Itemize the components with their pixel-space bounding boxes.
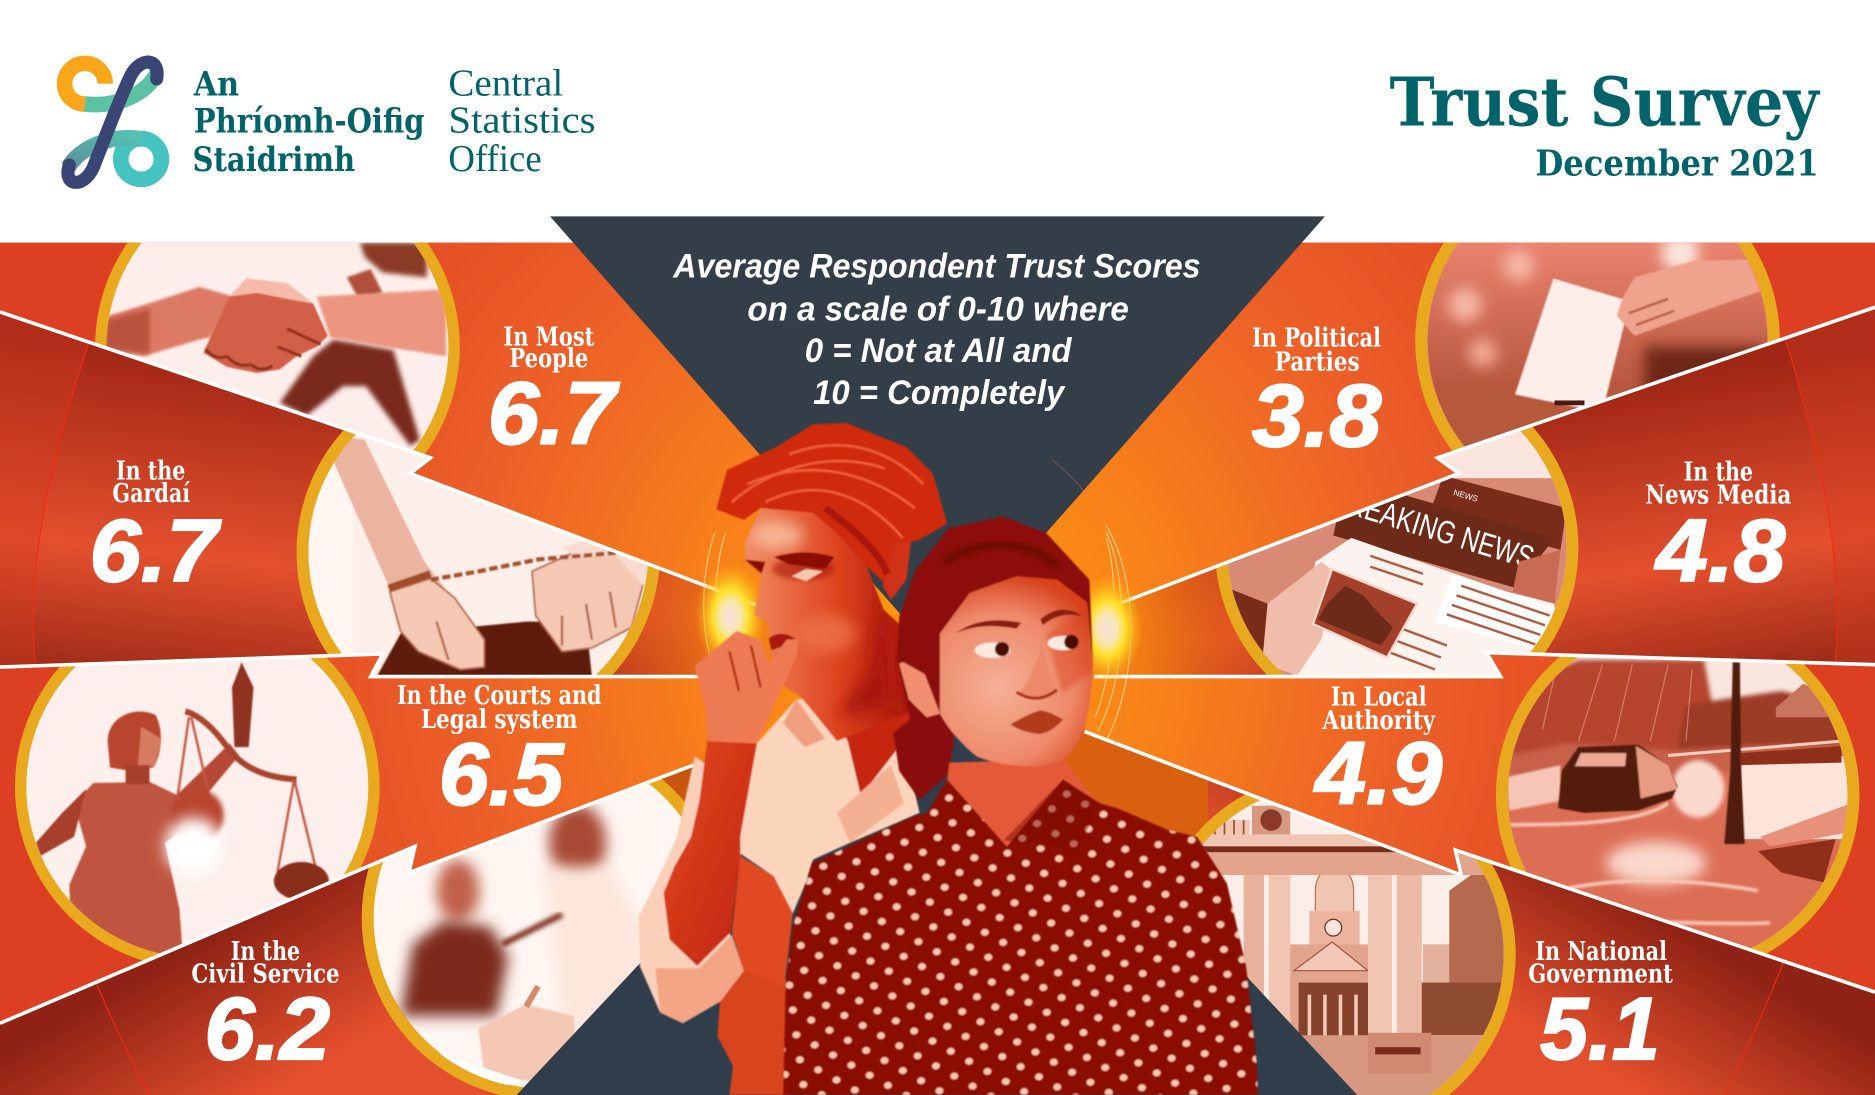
- number: in national government: Government: [1528, 960, 1673, 990]
- man neck: [800, 637, 914, 777]
- number: in most people: 6.7: [488, 364, 620, 462]
- woman face: [940, 576, 1093, 766]
- illustration: woman: [783, 516, 1258, 1095]
- man hair: [716, 423, 947, 583]
- photo: lady justice: [14, 658, 380, 960]
- panel: in political parties: [1046, 242, 1875, 610]
- number: in national government: In National: [1535, 937, 1667, 967]
- photo: civil servants writing: [362, 779, 686, 1095]
- photo: breaking news: BREAKING NEWS: [1328, 480, 1538, 576]
- man chest: [804, 646, 921, 796]
- panel: bottom dark triangle: [517, 646, 1357, 1095]
- photo: ballot box: [1415, 242, 1780, 451]
- panel: in the gardai: [0, 314, 772, 675]
- number: in the civil service: [192, 940, 339, 1062]
- glow behind heads: [695, 460, 1143, 753]
- number: in the courts: Legal system: [421, 705, 578, 735]
- illustration: man: [639, 423, 947, 1095]
- logo: CSO mark: [65, 62, 161, 182]
- number: in the civil service: 6.2: [204, 979, 330, 1078]
- number: in the civil service: Civil Service: [191, 960, 340, 990]
- heading: scale explanation: 0 = Not at All and: [805, 332, 1072, 370]
- man shirt: [740, 699, 920, 913]
- panel: in the civil service: [0, 762, 742, 1095]
- number: in the news media: News Media: [1645, 480, 1792, 510]
- number: in national government: [1529, 940, 1673, 1062]
- panel: in the courts and legal system: [14, 656, 803, 960]
- number: in national government: 5.1: [1540, 979, 1660, 1078]
- panel: in national government: [1064, 732, 1875, 1095]
- photo: flooded road: [1496, 656, 1860, 954]
- woman neck: [947, 759, 1106, 851]
- woman shirt: [783, 779, 1258, 1095]
- panel: in the news media: [1092, 309, 1875, 676]
- logo: english name: Office: [448, 138, 542, 180]
- man face: [745, 508, 914, 741]
- number: in most people: [491, 326, 621, 446]
- woman front hair: [899, 516, 1093, 681]
- number: in the gardai: In the: [116, 456, 185, 486]
- number: in political parties: 3.8: [1252, 366, 1382, 465]
- panel: top dark triangle: [550, 216, 1325, 656]
- title: December 2021: [1535, 143, 1819, 185]
- number: in local authority: 4.9: [1313, 723, 1442, 822]
- number: in the news media: In the: [1684, 458, 1753, 488]
- number: in the gardai: 6.7: [90, 501, 222, 600]
- heading: scale explanation: 10 = Completely: [813, 374, 1066, 412]
- man tucked arm: [732, 856, 793, 986]
- logo: english name: [448, 63, 596, 180]
- heading: scale explanation: Average Respondent Trust Scores: [672, 247, 1201, 285]
- white dividing lines: [0, 307, 1875, 1023]
- logo: irish name: An: [193, 65, 239, 104]
- number: in the news media: [1646, 460, 1791, 584]
- number: in most people: In Most: [503, 322, 594, 352]
- number: in most people: People: [509, 344, 588, 374]
- logo: irish name: Staidrimh: [193, 140, 355, 179]
- number: in local authority: In Local: [1331, 682, 1427, 712]
- man left sleeve: [639, 757, 744, 1023]
- woman back hair: [893, 562, 957, 800]
- heading: scale explanation: [672, 247, 1201, 412]
- number: in the civil service: In the: [231, 937, 300, 967]
- number: in the courts: In the Courts and: [397, 681, 602, 711]
- logo: english name: Statistics: [448, 100, 596, 142]
- number: in the gardai: Gardaí: [112, 479, 190, 509]
- man lower torso: [717, 971, 789, 1095]
- number: in the gardai: [92, 460, 222, 584]
- logo: irish name: Phríomh-Oifig: [194, 102, 425, 141]
- number: in political parties: In Political: [1252, 324, 1381, 354]
- man hand: [695, 631, 799, 744]
- photo: breaking news: [1216, 427, 1578, 675]
- heading: scale explanation: on a scale of 0-10 where: [747, 290, 1129, 328]
- number: in the courts: 6.5: [439, 725, 565, 824]
- woman ear: [899, 657, 940, 717]
- logo: irish name: [193, 65, 425, 179]
- number: in the news media: 4.8: [1654, 501, 1786, 600]
- panel: in most people: [0, 242, 901, 624]
- man ear: [882, 540, 911, 600]
- panel: in local authority: [1083, 654, 1860, 954]
- photo: handshake: [95, 242, 460, 454]
- title: Trust Survey: [1390, 63, 1821, 142]
- number: in the courts: [398, 684, 601, 807]
- man forearm: [664, 736, 757, 966]
- photo: government buildings: [1194, 794, 1516, 1095]
- number: in local authority: [1312, 686, 1443, 806]
- number: in political parties: Parties: [1275, 348, 1360, 378]
- number: in political parties: [1252, 326, 1382, 448]
- number: in local authority: Authority: [1322, 706, 1436, 736]
- logo: english name: Central: [448, 63, 563, 105]
- photo: handcuffs: [296, 430, 660, 675]
- photo: breaking news: NEWS: [1452, 487, 1480, 504]
- title: [1390, 63, 1821, 185]
